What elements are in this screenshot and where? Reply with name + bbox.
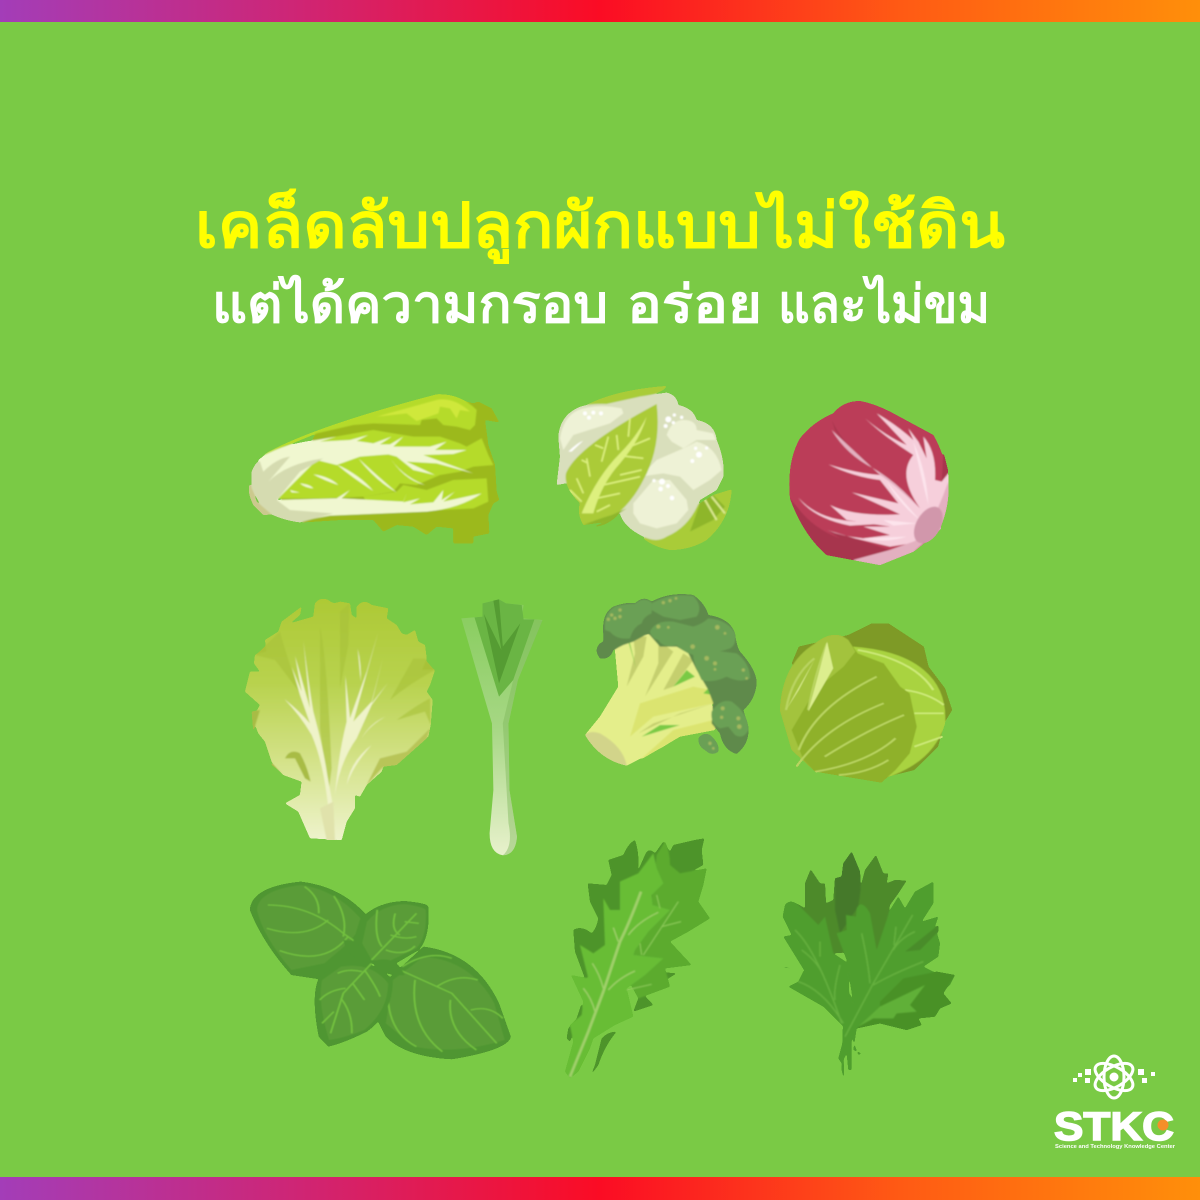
logo wordmark: STKC (1054, 1105, 1174, 1149)
subtitle: อร่อย (627, 276, 762, 334)
logo tagline: Science and Technology Knowledge Center (1055, 1144, 1176, 1150)
title: เคล็ดลับปลูกผักแบบไม่ใช้ดิน (195, 188, 1005, 264)
icon: leek (461, 599, 542, 855)
logo: STKC (1054, 1056, 1176, 1150)
icon: radicchio (789, 401, 949, 565)
logo orange dot (1158, 1120, 1168, 1130)
icon: basil (250, 882, 511, 1059)
bottom gradient bar (0, 1177, 1200, 1200)
icon: napa cabbage (249, 394, 499, 543)
icon: cabbage (780, 623, 952, 783)
icon: cauliflower (557, 386, 732, 550)
subtitle: แต่ได้ความกรอบ (212, 274, 608, 334)
subtitle: และไม่ขม (778, 274, 990, 334)
icon: mustard greens (565, 838, 710, 1078)
icon: broccoli (585, 594, 757, 766)
icon: parsley (780, 852, 955, 1080)
icon: lettuce leaf (245, 599, 435, 840)
icon: logo atom (1073, 1056, 1155, 1098)
subtitle (212, 274, 990, 334)
top gradient bar (0, 0, 1200, 22)
